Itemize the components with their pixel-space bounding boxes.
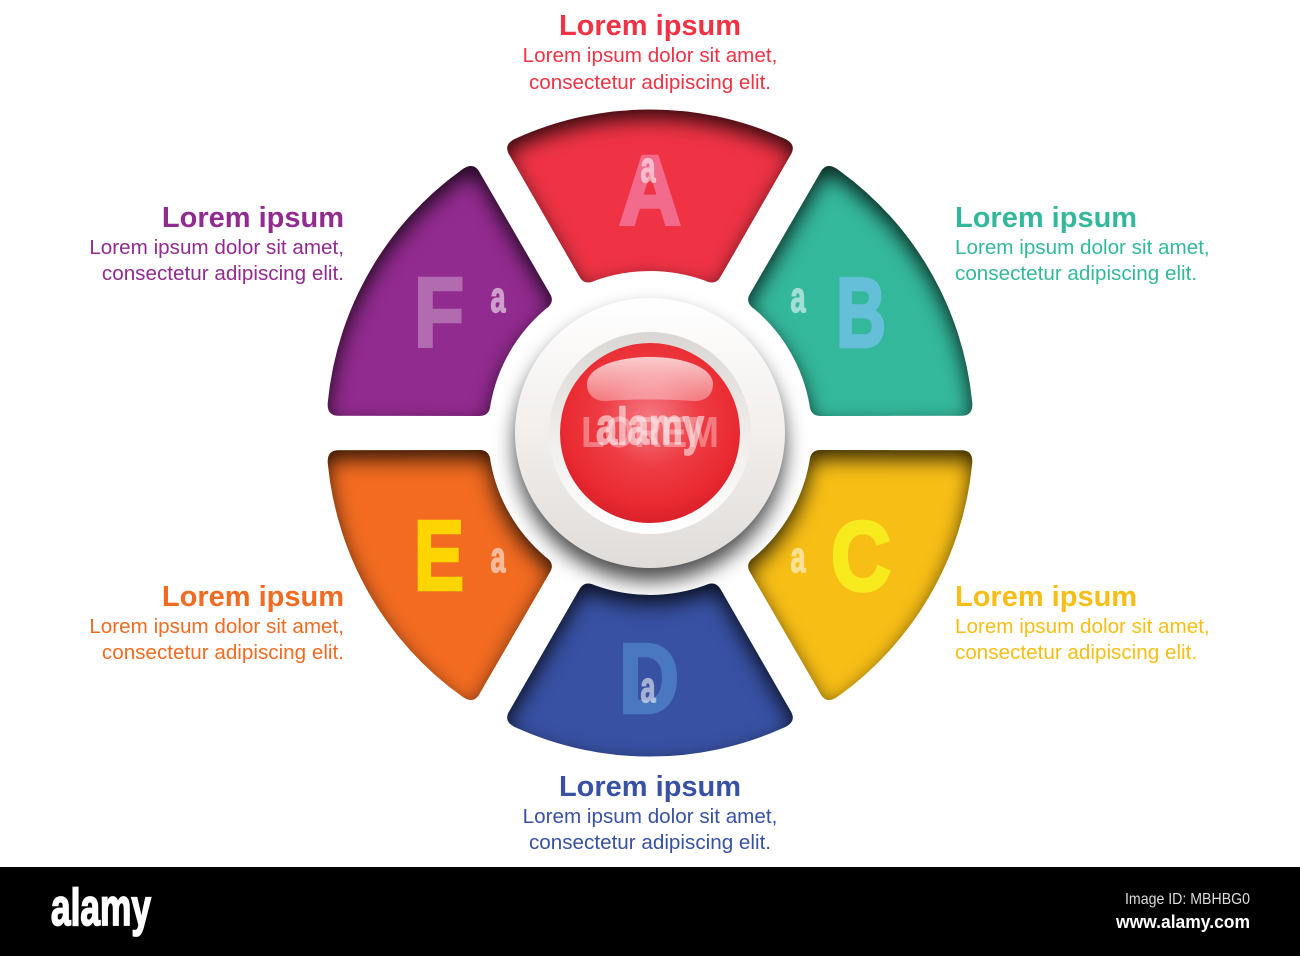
panel: segment A xyxy=(507,109,793,282)
text block D: Lorem ipsum dolor sit amet, xyxy=(523,805,777,828)
watermark a: a xyxy=(490,273,506,322)
inner ring xyxy=(549,332,751,534)
watermark a: a xyxy=(490,533,506,582)
segment B shape xyxy=(709,148,1002,481)
text block F: Lorem ipsum xyxy=(162,202,344,234)
letter A: A xyxy=(619,136,681,246)
watermark a: a xyxy=(790,533,806,582)
text block F: Lorem ipsum dolor sit amet, xyxy=(89,236,344,259)
text block C: Lorem ipsum xyxy=(955,581,1137,613)
segment C shape xyxy=(709,385,1002,718)
watermark a: a xyxy=(640,143,656,192)
text block B xyxy=(955,202,1210,285)
letter D: D xyxy=(619,624,679,734)
image id: Image ID: MBHBG0 xyxy=(1125,891,1250,908)
outer ring xyxy=(515,298,785,568)
text block D: Lorem ipsum xyxy=(559,771,741,803)
segment D shape xyxy=(507,584,793,757)
panel: segment E xyxy=(298,385,591,718)
text block B: consectetur adipiscing elit. xyxy=(955,262,1197,285)
text block A: Lorem ipsum xyxy=(559,10,741,42)
disc shadow xyxy=(515,311,785,581)
letter E: E xyxy=(414,500,464,610)
text block A: Lorem ipsum dolor sit amet, xyxy=(523,44,777,67)
center label: LOREM xyxy=(581,408,719,457)
text block A xyxy=(523,10,777,94)
panel: segment F xyxy=(298,148,591,481)
text block E: consectetur adipiscing elit. xyxy=(102,641,344,664)
footer logo: alamy xyxy=(51,879,151,937)
footer bar xyxy=(0,867,1300,956)
panel: segment B xyxy=(709,148,1002,481)
watermark a: a xyxy=(640,663,656,712)
letter F: F xyxy=(414,258,464,368)
segment E shape xyxy=(298,385,591,718)
gloss highlight xyxy=(587,357,713,401)
website: www.alamy.com xyxy=(1115,912,1250,932)
letter C: C xyxy=(831,501,891,611)
text block A: consectetur adipiscing elit. xyxy=(529,71,771,94)
text block B: Lorem ipsum xyxy=(955,202,1137,234)
text block C: consectetur adipiscing elit. xyxy=(955,641,1197,664)
segment F shape xyxy=(298,148,591,481)
watermark a: a xyxy=(790,273,806,322)
segment A shape xyxy=(507,109,793,282)
center button xyxy=(515,298,785,581)
letter B: B xyxy=(836,258,886,368)
text block F xyxy=(89,202,344,285)
center watermark: alamy xyxy=(596,398,704,456)
panel: segment C xyxy=(709,385,1002,718)
text block E: Lorem ipsum dolor sit amet, xyxy=(89,615,344,638)
red sphere xyxy=(560,343,740,523)
text block C xyxy=(955,581,1210,664)
text block C: Lorem ipsum dolor sit amet, xyxy=(955,615,1210,638)
panel: segment D xyxy=(507,584,793,757)
text block F: consectetur adipiscing elit. xyxy=(102,262,344,285)
text block D xyxy=(523,771,777,854)
text block D: consectetur adipiscing elit. xyxy=(529,831,771,854)
text block E: Lorem ipsum xyxy=(162,581,344,613)
text block B: Lorem ipsum dolor sit amet, xyxy=(955,236,1210,259)
text block E xyxy=(89,581,344,664)
